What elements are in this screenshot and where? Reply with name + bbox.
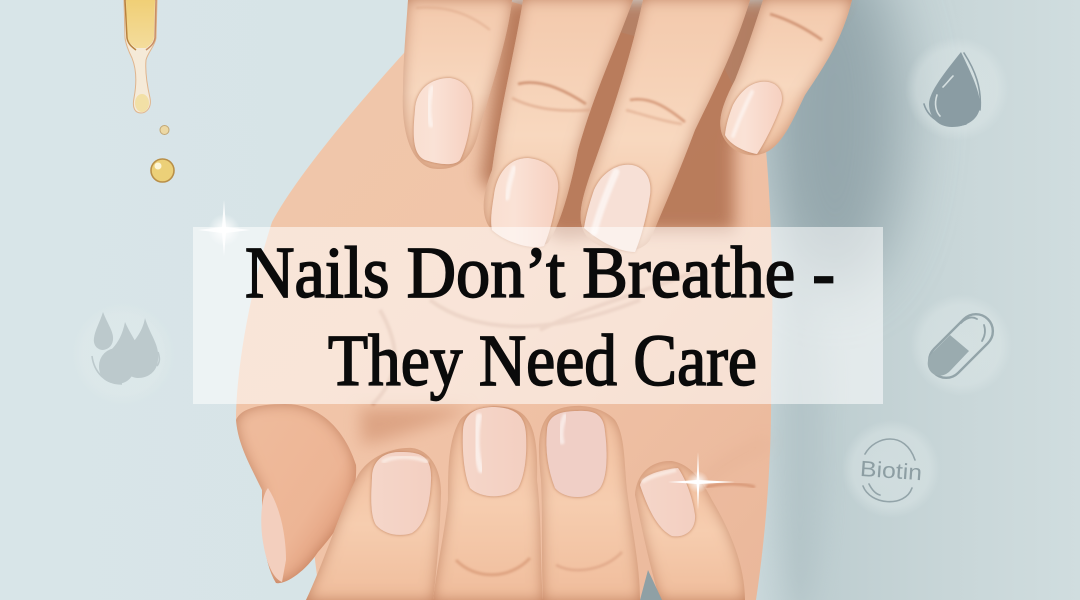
gap between bottom fingers xyxy=(640,570,662,600)
nail b xyxy=(463,407,526,496)
nail 2 xyxy=(491,158,558,247)
bottom thumb-side finger xyxy=(236,404,356,583)
icon: biotin badge xyxy=(842,420,940,518)
top finger 1 xyxy=(403,0,512,169)
nail a xyxy=(371,452,431,535)
bottom finger a xyxy=(306,448,441,600)
hands photo illustration xyxy=(236,0,852,600)
nail c xyxy=(546,411,607,497)
palm creases xyxy=(372,270,700,405)
palm shadow beside bottom fingers xyxy=(689,440,768,530)
top finger 4 xyxy=(720,0,852,155)
title banner xyxy=(193,227,883,404)
biotin label: Biotin xyxy=(859,456,923,485)
dropper with oil xyxy=(124,0,174,182)
title line 2: They Need Care xyxy=(328,320,757,401)
nail d xyxy=(640,468,695,536)
large oil drop xyxy=(151,159,174,182)
top finger 3 xyxy=(581,0,750,252)
icon: pill capsule xyxy=(910,294,1012,396)
bottom finger c xyxy=(539,406,640,600)
sparkle top left xyxy=(198,200,250,256)
small oil drop xyxy=(160,126,169,134)
top finger 2 xyxy=(484,0,633,247)
bottom finger d xyxy=(635,461,745,600)
sparkle bottom right xyxy=(668,452,735,510)
palm shading behind top fingers xyxy=(480,0,845,240)
nail 3 xyxy=(584,165,650,252)
title line 1: Nails Don’t Breathe - xyxy=(245,232,835,313)
icon: oil drops xyxy=(71,302,175,406)
nail on thumb-side finger xyxy=(261,488,286,582)
palm fold above bottom fingers xyxy=(360,408,470,445)
nail 4 xyxy=(725,82,782,154)
nail 1 xyxy=(414,78,472,164)
palm xyxy=(236,0,772,600)
bottom finger b xyxy=(433,406,543,600)
icon: water drop xyxy=(905,37,1009,141)
